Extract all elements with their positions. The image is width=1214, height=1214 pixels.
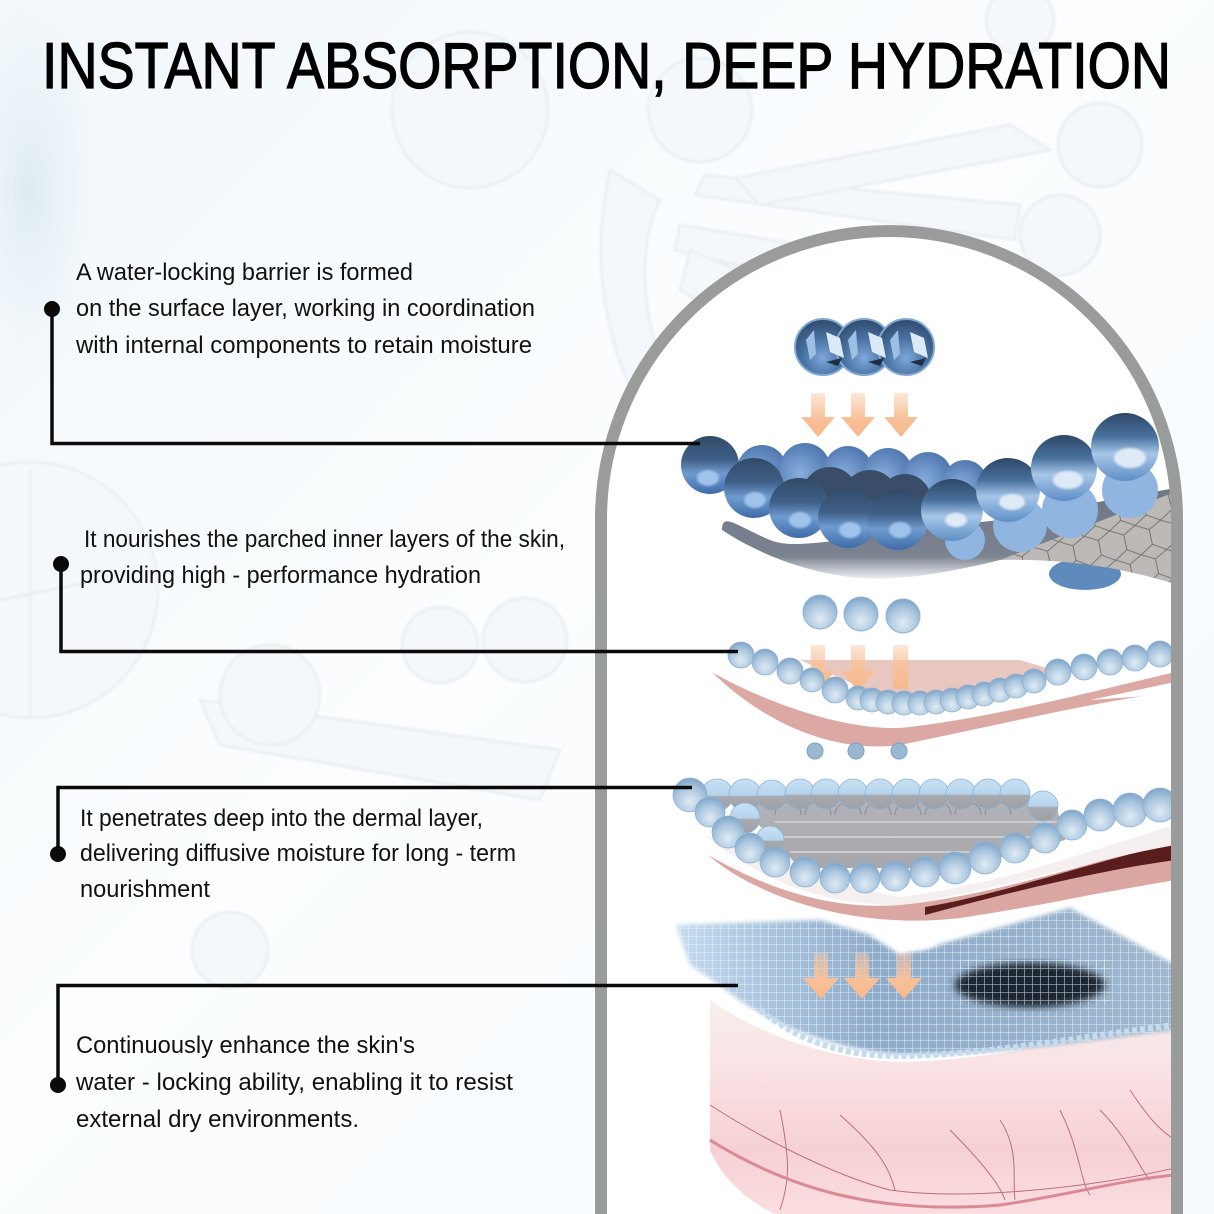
layer 2: pink sheet (712, 660, 1175, 746)
callout 3 (50, 788, 692, 903)
layer 3: gray centre of spheres (735, 800, 1065, 868)
arch frame (601, 231, 1177, 1214)
layer 3: pink and dark red sheet (705, 825, 1175, 921)
text block 3: nourishment (80, 876, 210, 903)
layer 4: skin block (710, 1000, 1175, 1214)
callout 1 (44, 259, 700, 444)
icon: large water molecules (795, 319, 934, 375)
icon: medium water molecules (803, 595, 920, 633)
layers diagram (673, 319, 1177, 1214)
text block 4: Continuously enhance the skin's (76, 1032, 415, 1059)
text block 2: It nourishes the parched inner layers of the skin, (84, 526, 565, 553)
text block 3: It penetrates deep into the dermal layer, (80, 805, 483, 832)
arrows: bottom (803, 953, 922, 999)
arrows: top (801, 393, 918, 437)
text block 1: on the surface layer, working in coordination (76, 295, 535, 322)
layer 1: lower sphere (1049, 562, 1121, 590)
layer 1: large blue spheres (681, 413, 1159, 560)
text block 3: delivering diffusive moisture for long - term (80, 840, 516, 867)
text block 1: A water-locking barrier is formed (76, 259, 413, 286)
text block 4: water - locking ability, enabling it to resist (75, 1069, 513, 1096)
layer 3: pale blue spheres (673, 778, 1177, 893)
veins (710, 1090, 1175, 1210)
leader line 2 (53, 556, 738, 652)
text block 2: providing high - performance hydration (80, 562, 481, 589)
leader line 4 (50, 986, 738, 1093)
text block 3 (80, 805, 516, 903)
layer 1: gray sheet with hexagons (722, 488, 1175, 584)
text block 4 (75, 1032, 513, 1133)
leader line 3 (50, 788, 692, 862)
layer 2: small bubbles (728, 641, 1173, 715)
text block 1: with internal components to retain moisture (75, 332, 532, 359)
text block 1 (75, 259, 535, 359)
callout 4 (50, 986, 738, 1133)
text block 4: external dry environments. (76, 1106, 359, 1133)
leader line 1 (44, 301, 700, 444)
text block 2 (80, 526, 565, 589)
layer 4: mesh of spheres (676, 908, 1175, 1056)
icon: small water molecules (807, 743, 907, 759)
callout 2 (53, 526, 738, 652)
panel: skin layers arch (601, 231, 1177, 1214)
arrows: middle (801, 645, 908, 691)
